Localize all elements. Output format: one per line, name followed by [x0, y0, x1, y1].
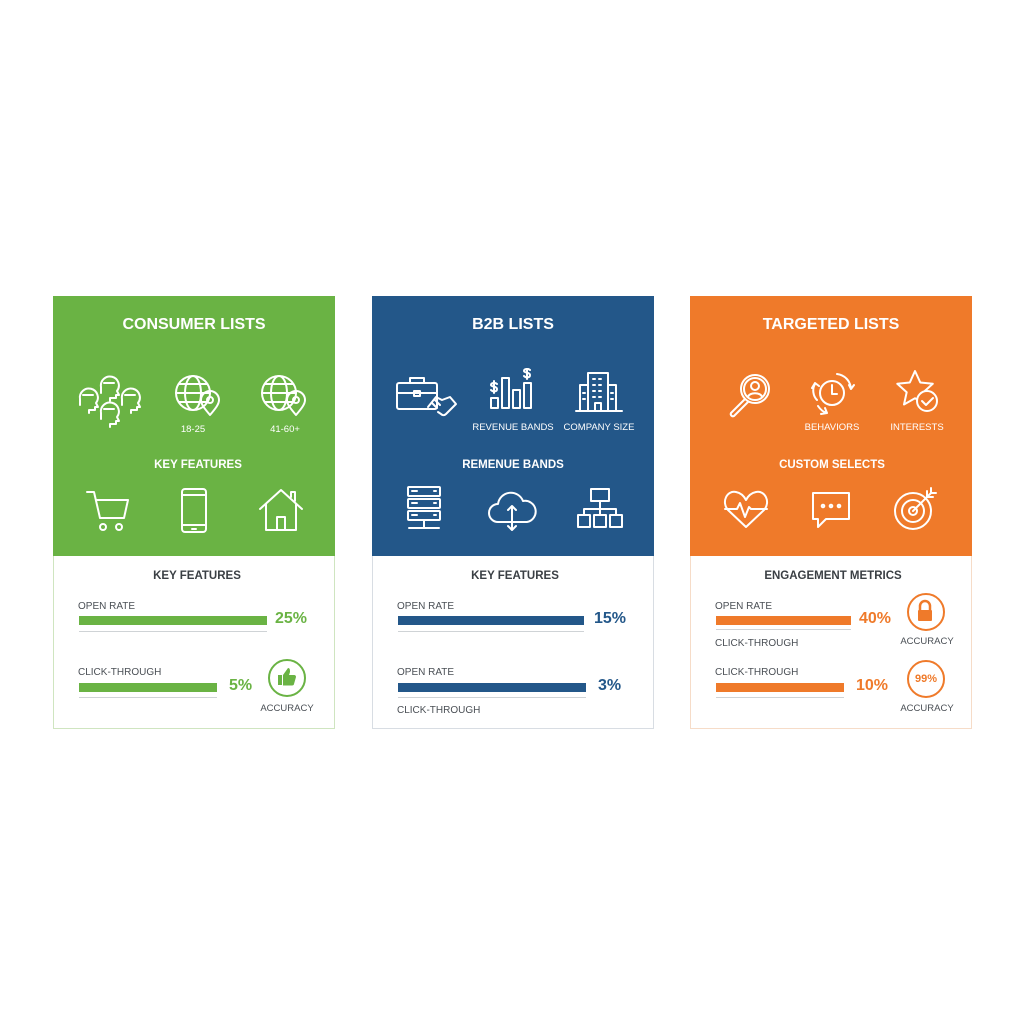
icon: star check	[896, 370, 938, 412]
icon: cart	[86, 491, 129, 531]
metric: open rate 3: OPEN RATE	[397, 667, 454, 678]
icon: revenue bars	[490, 368, 532, 409]
icon: chat bubble	[812, 492, 850, 528]
icon: target	[894, 487, 937, 530]
metric: open rate 15: OPEN RATE	[397, 601, 454, 612]
icon: globe 41-60	[261, 375, 306, 416]
title: TARGETED LISTS	[763, 316, 899, 333]
icon: house	[259, 489, 303, 531]
metrics heading: ENGAGEMENT METRICS	[764, 570, 902, 582]
badge 99%: 99%	[915, 673, 937, 685]
header: targeted	[690, 296, 972, 556]
icon: heads	[78, 376, 141, 428]
panel: b2b lists	[372, 296, 654, 729]
icon: globe 18-25	[175, 375, 220, 416]
subheading: CUSTOM SELECTS	[779, 459, 885, 471]
icon: clock cycle	[811, 373, 855, 415]
label revenue bands: REVENUE BANDS	[472, 422, 554, 433]
title: CONSUMER LISTS	[122, 316, 266, 333]
header: b2b	[372, 296, 654, 556]
icon: server	[407, 486, 441, 529]
badge 99%	[907, 660, 945, 698]
metrics heading: KEY FEATURES	[471, 570, 559, 582]
icon: thumbs up	[268, 659, 306, 697]
panel: targeted lists	[690, 296, 972, 729]
icon: hierarchy	[577, 488, 623, 528]
panel: consumer lists: 25%	[275, 610, 307, 627]
icon: cloud	[488, 492, 537, 531]
label behaviors: BEHAVIORS	[805, 422, 859, 433]
metrics heading: KEY FEATURES	[153, 570, 241, 582]
label interests: INTERESTS	[890, 422, 944, 433]
icon: heart pulse	[724, 490, 768, 528]
icon: briefcase handshake	[396, 377, 457, 416]
label accuracy: ACCURACY	[900, 636, 954, 647]
metric: open rate: OPEN RATE	[78, 601, 135, 612]
icon: phone	[181, 488, 207, 533]
panel: b2b lists: 15%	[594, 610, 626, 627]
subheading: REMENUE BANDS	[462, 459, 564, 471]
metric: click-through 10: CLICK-THROUGH	[715, 667, 798, 678]
panel: targeted lists: 10%	[856, 677, 888, 694]
label accuracy: ACCURACY	[260, 703, 314, 714]
icon: magnifier person	[730, 374, 770, 418]
icon: lock	[907, 593, 945, 631]
label company size: COMPANY SIZE	[564, 422, 634, 433]
label click-through: CLICK-THROUGH	[715, 638, 798, 649]
label accuracy 2: ACCURACY	[900, 703, 954, 714]
panel: targeted lists: 40%	[859, 610, 891, 627]
label click-through: CLICK-THROUGH	[397, 705, 480, 716]
subheading: KEY FEATURES	[154, 459, 242, 471]
panel: b2b lists: 3%	[598, 677, 621, 694]
icon: building	[575, 372, 623, 412]
panel: consumer lists: 5%	[229, 677, 252, 694]
title: B2B LISTS	[472, 316, 554, 333]
panel: consumer lists	[53, 296, 335, 729]
header: consumer	[53, 296, 335, 556]
metric: click-through: CLICK-THROUGH	[78, 667, 161, 678]
metric: open rate 40: OPEN RATE	[715, 601, 772, 612]
label 18-25: 18-25	[181, 424, 205, 435]
label 41-60+: 41-60+	[270, 424, 300, 435]
